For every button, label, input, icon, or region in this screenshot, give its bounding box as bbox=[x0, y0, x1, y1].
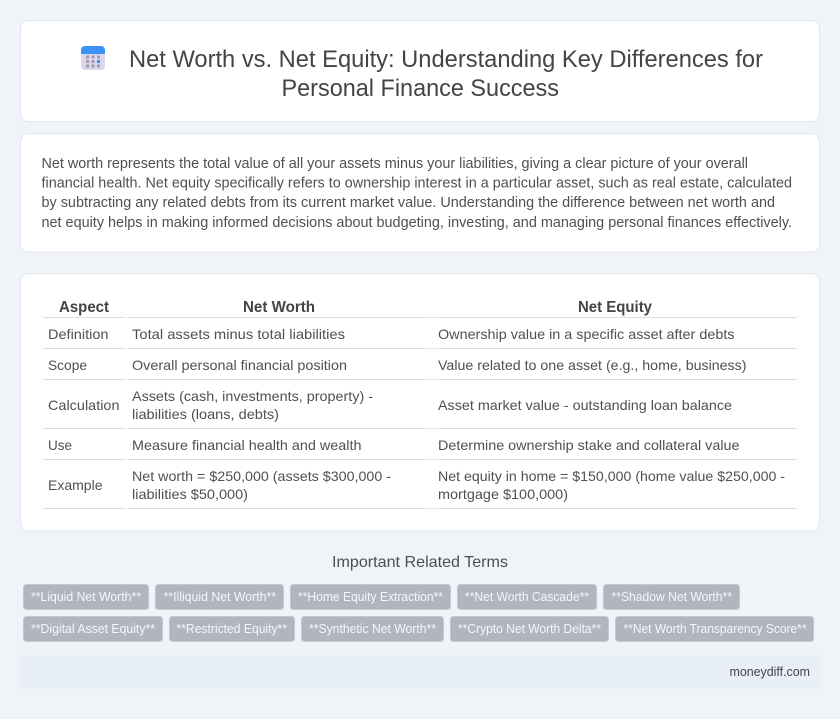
footer: moneydiff.com bbox=[730, 665, 810, 679]
table header row: Net Equity bbox=[578, 299, 652, 316]
table row: calculation: Assets (cash, investments, property) - bbox=[132, 388, 373, 404]
related term tags: **Net Worth Transparency Score** bbox=[624, 622, 807, 636]
table row: use: Use bbox=[48, 437, 72, 453]
panel: introduction text bbox=[20, 134, 820, 252]
table row: calculation: Calculation bbox=[48, 397, 120, 413]
related term tags bbox=[24, 584, 814, 642]
table row: example: Net worth = $250,000 (assets $300,000 - bbox=[132, 468, 391, 484]
related term tags: **Home Equity Extraction** bbox=[298, 590, 443, 604]
panel: introduction text: by subtracting any related debts from its current market value. Understanding the difference between net worth and bbox=[42, 195, 775, 211]
table row: calculation: Asset market value - outstanding loan balance bbox=[438, 397, 732, 413]
table row: example: mortgage $100,000) bbox=[438, 486, 568, 502]
heading: important related terms: Important Related Terms bbox=[332, 554, 508, 571]
table row: example: liabilities $50,000) bbox=[132, 486, 248, 502]
table row: definition bbox=[48, 326, 734, 342]
panel: comparison table bbox=[20, 274, 820, 531]
table row: example: Net equity in home = $150,000 (home value $250,000 - bbox=[438, 468, 785, 484]
title bbox=[129, 46, 763, 102]
title: Net Worth vs. Net Equity: Understanding Key Differences for bbox=[129, 46, 763, 73]
table row: scope: Scope bbox=[48, 357, 87, 373]
related term tags: **Net Worth Cascade** bbox=[465, 590, 589, 604]
table row: calculation bbox=[48, 388, 732, 422]
panel: header bbox=[20, 20, 820, 122]
table row: definition: Definition bbox=[48, 326, 108, 342]
related term tags: **Crypto Net Worth Delta** bbox=[458, 622, 601, 636]
related term tags: **Digital Asset Equity** bbox=[31, 622, 155, 636]
panel: introduction text: financial health. Net equity specifically refers to ownership interest in a particular asset, such as real estate, calculated bbox=[42, 176, 792, 192]
related term tags: **Liquid Net Worth** bbox=[31, 590, 141, 604]
table header row: Net Worth bbox=[243, 299, 315, 316]
table row: scope bbox=[48, 357, 746, 373]
table row: calculation: liabilities (loans, debts) bbox=[132, 406, 279, 422]
table row: scope: Value related to one asset (e.g., home, business) bbox=[438, 357, 746, 373]
related term tags: **Illiquid Net Worth** bbox=[164, 590, 276, 604]
table row: use bbox=[48, 437, 740, 453]
related term tags: **Restricted Equity** bbox=[176, 622, 287, 636]
title: Personal Finance Success bbox=[282, 75, 559, 102]
table row: definition: Total assets minus total liabilities bbox=[132, 326, 345, 342]
icon: calendar bbox=[81, 46, 105, 70]
table row: scope: Overall personal financial position bbox=[132, 357, 347, 373]
table row: example bbox=[48, 468, 785, 502]
related term tags: **Shadow Net Worth** bbox=[612, 590, 732, 604]
table row: use: Determine ownership stake and collateral value bbox=[438, 437, 740, 453]
table header row: Aspect bbox=[59, 299, 110, 316]
table row: example: Example bbox=[48, 477, 103, 493]
related term tags: **Synthetic Net Worth** bbox=[309, 622, 436, 636]
table row: use: Measure financial health and wealth bbox=[132, 437, 362, 453]
footer bbox=[20, 655, 820, 689]
panel: introduction text: Net worth represents the total value of all your assets minus your liabilities, giving a clear picture of your overall bbox=[42, 156, 748, 172]
table header row bbox=[59, 299, 652, 316]
panel: introduction text: net equity helps in making informed decisions about budgeting, investing, and managing personal finances effectively. bbox=[42, 215, 792, 231]
table row: definition: Ownership value in a specific asset after debts bbox=[438, 326, 734, 342]
